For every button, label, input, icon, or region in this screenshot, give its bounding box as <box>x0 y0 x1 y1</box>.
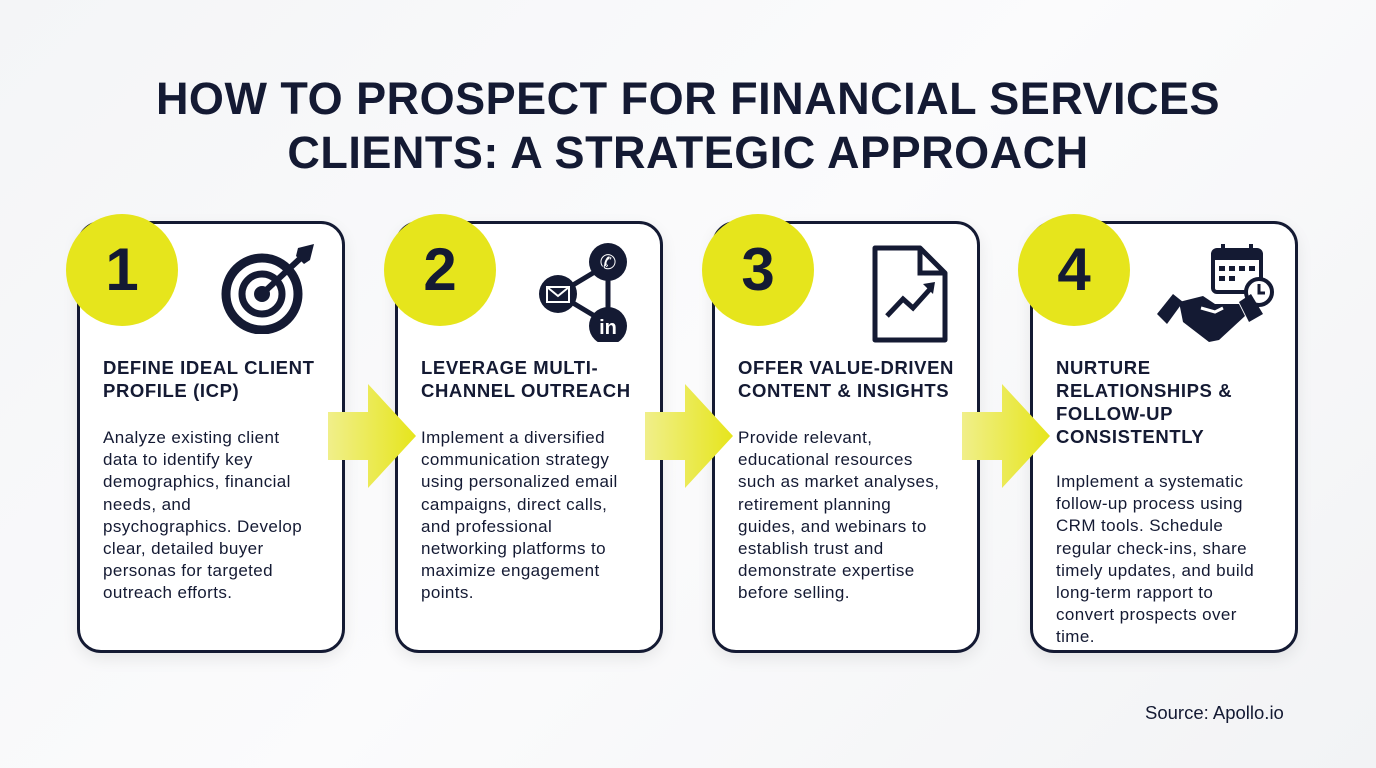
text: Implement a systematic follow-up process using CRM tools. Schedule regular check-ins, share timely updates, and build long-term rapport to convert prospects over time. <box>1056 472 1254 646</box>
icon: channels: in <box>599 317 617 339</box>
icon: channels <box>539 243 627 342</box>
title <box>156 73 1220 178</box>
badge 4 <box>1018 214 1130 326</box>
text: Provide relevant, educational resources such as market analyses, retirement planning guides, and webinars to establish trust and demonstrate expertise before selling. <box>738 428 939 602</box>
arrow 2 <box>645 384 733 488</box>
heading: LEVERAGE MULTI-CHANNEL OUTREACH <box>421 357 631 401</box>
badge 1 <box>66 214 178 326</box>
heading: DEFINE IDEAL CLIENT PROFILE (ICP) <box>103 357 314 401</box>
icon: target <box>222 244 314 334</box>
badge 2 <box>384 214 496 326</box>
badge 2: 2 <box>423 236 457 303</box>
panel: step 1 <box>77 221 345 653</box>
heading: OFFER VALUE-DRIVEN CONTENT & INSIGHTS <box>738 357 954 401</box>
arrow 3 <box>962 384 1050 488</box>
badge 3: 3 <box>741 236 775 303</box>
icon: handshake calendar <box>1157 244 1274 342</box>
text: Analyze existing client data to identify key demographics, financial needs, and psychographics. Develop clear, detailed buyer personas for targeted outreach efforts. <box>103 428 302 602</box>
title: HOW TO PROSPECT FOR FINANCIAL SERVICES <box>156 73 1220 124</box>
icon: channels: ✆ <box>600 252 616 274</box>
panel: step 2 <box>395 221 663 653</box>
icon: document chart <box>872 246 948 342</box>
text: Implement a diversified communication strategy using personalized email campaigns, direct calls, and professional networking platforms to maximize engagement points. <box>421 428 618 602</box>
badge 3 <box>702 214 814 326</box>
badge 1: 1 <box>105 236 139 303</box>
heading: NURTURE RELATIONSHIPS & FOLLOW-UP CONSISTENTLY <box>1056 357 1232 447</box>
panel: step 4 <box>1030 221 1298 653</box>
source: Source: Apollo.io <box>1145 702 1284 723</box>
panel: step 3 <box>712 221 980 653</box>
badge 4: 4 <box>1057 236 1091 303</box>
arrow 1 <box>328 384 416 488</box>
title: CLIENTS: A STRATEGIC APPROACH <box>287 127 1089 178</box>
